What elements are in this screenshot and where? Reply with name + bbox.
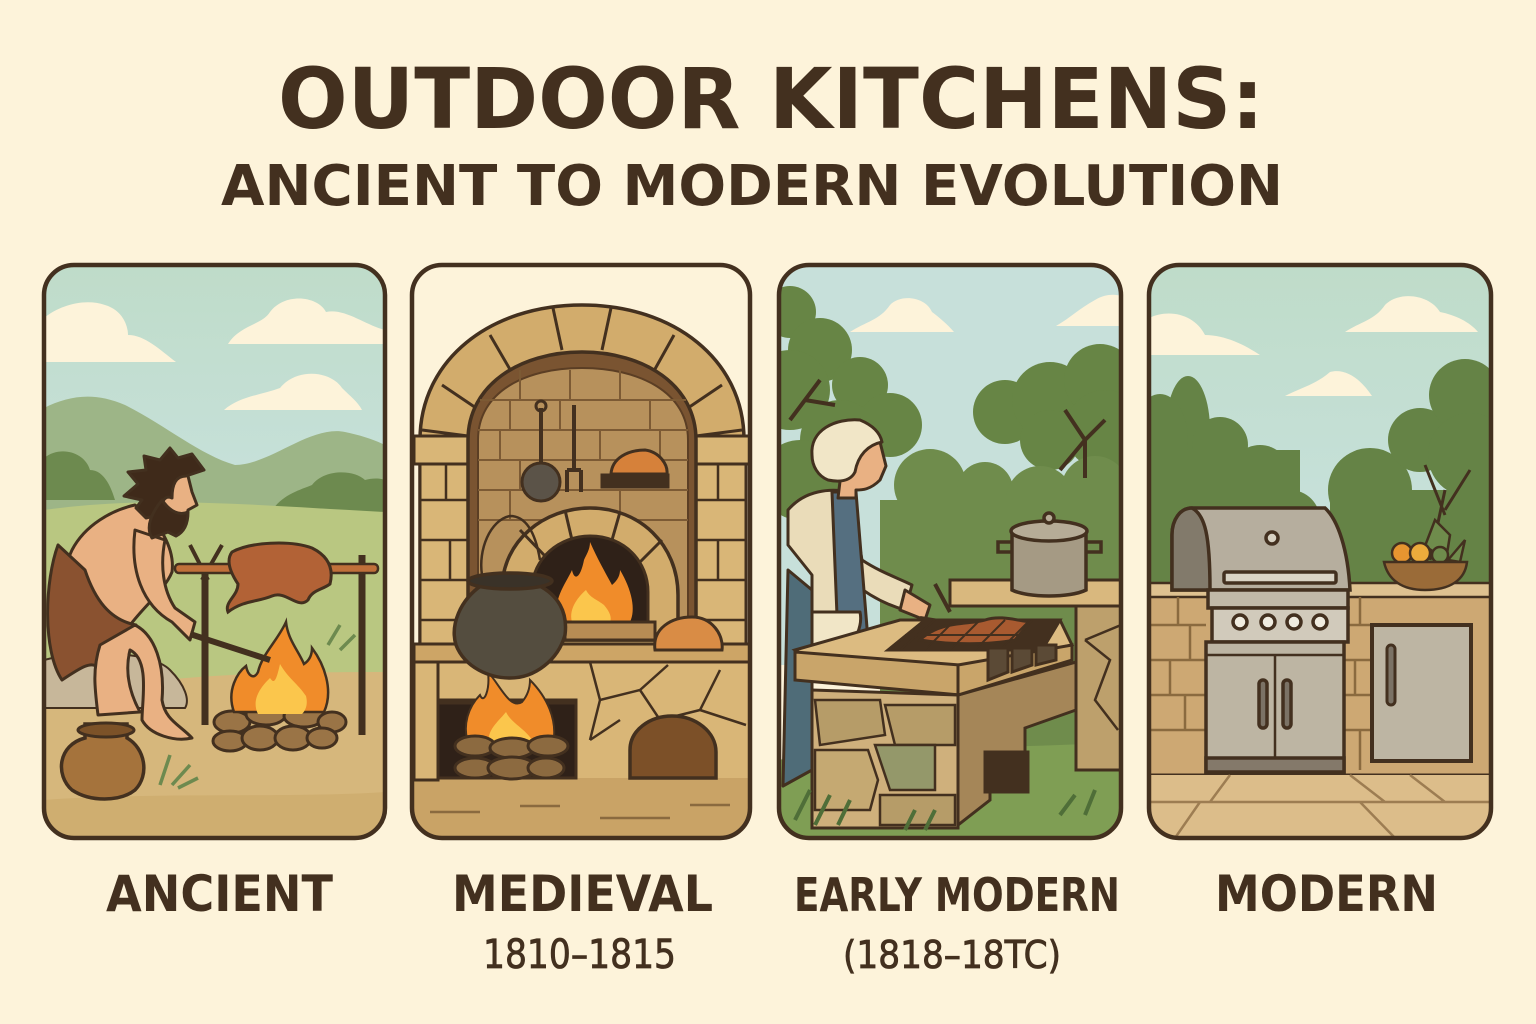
early modern clouds — [850, 295, 1121, 332]
modern cabinet — [1206, 642, 1344, 772]
ancient fire stones — [213, 703, 346, 751]
title: OUTDOOR KITCHENS: — [278, 50, 1264, 148]
ancient hills — [46, 396, 383, 510]
ancient ground — [46, 672, 383, 800]
early modern ground — [779, 742, 1121, 838]
modern clouds — [1149, 296, 1478, 396]
label: ancient: ANCIENT — [106, 865, 333, 923]
medieval logs — [455, 736, 568, 779]
ancient grass — [160, 625, 355, 788]
modern grill control panel — [1208, 590, 1348, 642]
medieval fork — [567, 405, 581, 492]
ancient fire — [231, 622, 328, 714]
ancient clouds — [44, 298, 385, 410]
medieval brick lines — [478, 370, 688, 520]
panel: modern — [1132, 265, 1512, 838]
label: medieval dates: 1810–1815 — [483, 932, 676, 978]
man: skirt — [48, 545, 136, 680]
ancient sky — [46, 267, 383, 465]
early modern stones — [815, 700, 955, 825]
label: medieval: MEDIEVAL — [452, 865, 713, 923]
woman: bonnet — [812, 420, 882, 481]
man: head — [164, 476, 198, 512]
label: early modern: EARLY MODERN — [794, 868, 1120, 922]
panel: medieval — [412, 265, 750, 838]
modern frame — [1149, 265, 1491, 838]
ancient roast — [227, 543, 331, 612]
medieval arch — [420, 305, 744, 660]
early modern stock pot — [998, 513, 1101, 596]
medieval counter stones — [590, 662, 746, 740]
medieval frame — [412, 265, 750, 838]
man: torso — [69, 504, 174, 623]
woman: hand — [900, 590, 930, 620]
ancient boulder — [44, 653, 187, 708]
subtitle: ANCIENT TO MODERN EVOLUTION — [221, 154, 1283, 219]
early modern grass — [795, 790, 1095, 830]
modern side door — [1372, 625, 1471, 761]
medieval piers — [414, 436, 750, 644]
medieval cauldron — [454, 516, 566, 678]
medieval shelf bread — [602, 450, 668, 487]
early modern back counter — [1076, 605, 1121, 770]
medieval pan — [522, 401, 560, 501]
medieval firebox — [438, 703, 576, 778]
man: arm — [134, 530, 195, 640]
modern trees — [1132, 359, 1512, 600]
modern grill hood — [1172, 508, 1350, 590]
modern fruit bowl — [1384, 520, 1467, 590]
medieval wood store arch — [630, 716, 716, 778]
ancient man — [48, 448, 204, 739]
label: modern: MODERN — [1215, 865, 1438, 923]
medieval oven fire — [556, 542, 633, 622]
ancient meadow — [46, 502, 383, 679]
modern sky — [1149, 265, 1491, 605]
woman: skirt — [783, 570, 812, 786]
early modern tree right — [973, 344, 1145, 470]
ancient bushes — [44, 451, 385, 514]
early modern grill — [888, 618, 1060, 680]
woman: blouse — [788, 490, 912, 640]
medieval arch voussoirs — [422, 308, 742, 436]
early modern woman — [783, 420, 950, 786]
panel: ancient — [44, 265, 385, 838]
ancient poker — [190, 634, 270, 660]
woman: head — [838, 440, 886, 498]
label: early modern dates: (1818–18TC) — [843, 933, 1061, 977]
ancient frame — [44, 265, 385, 838]
early modern frame — [779, 265, 1121, 838]
medieval oven arch — [502, 508, 678, 640]
panel: early modern — [750, 265, 1145, 838]
man: beard — [149, 500, 188, 538]
medieval counter — [440, 664, 748, 778]
early modern tree left — [750, 286, 922, 520]
woman: apron — [832, 492, 868, 640]
man: leg — [95, 625, 192, 739]
medieval ground — [412, 778, 750, 838]
medieval background — [412, 265, 750, 838]
early modern bushes — [880, 449, 1129, 780]
medieval right loaf — [655, 617, 722, 650]
stone base — [812, 690, 958, 828]
medieval niche — [468, 352, 696, 640]
early modern sky — [779, 265, 1121, 665]
ancient pot — [61, 723, 144, 799]
modern counter wall — [1149, 590, 1491, 775]
ancient spit — [175, 545, 378, 735]
man: hair — [124, 448, 204, 518]
medieval lower fire — [466, 672, 554, 748]
early modern grill counter — [795, 620, 1076, 828]
modern patio — [1149, 775, 1491, 838]
